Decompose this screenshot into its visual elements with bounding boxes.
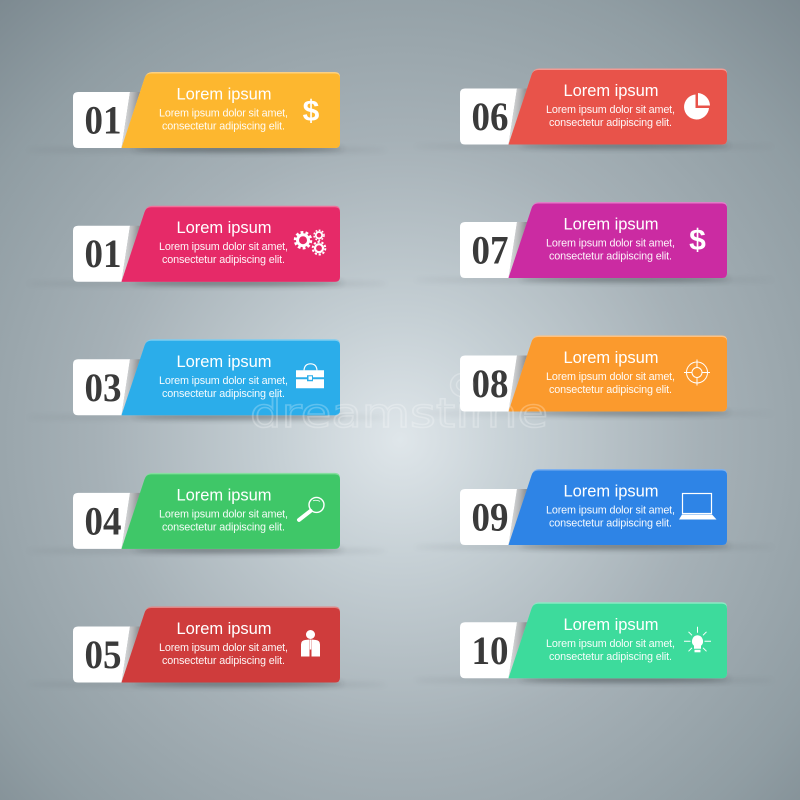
number tab: 05 [84, 632, 122, 677]
body text: consectetur adipiscing elit. [549, 250, 672, 262]
icon: businessman [301, 630, 320, 656]
body text: Lorem ipsum dolor sit amet, [159, 241, 288, 253]
coloured panel [508, 336, 727, 412]
body text [546, 238, 675, 262]
coloured panel [122, 339, 340, 415]
icon: pie chart [684, 93, 710, 119]
icon: laptop [679, 494, 716, 520]
number tab: 10 [472, 628, 508, 673]
body text [159, 241, 288, 266]
number tab [460, 222, 529, 278]
card 08 orange [414, 336, 774, 416]
body text [546, 371, 675, 396]
body text: consectetur adipiscing elit. [162, 254, 285, 266]
icon: target [684, 360, 710, 386]
coloured panel [508, 469, 727, 545]
coloured panel [122, 473, 340, 549]
body text: Lorem ipsum dolor sit amet, [546, 104, 675, 116]
heading: Lorem ipsum [564, 82, 658, 100]
body text [546, 504, 675, 530]
number tab [460, 88, 529, 144]
card 09 blue [414, 469, 774, 549]
number tab: 09 [472, 494, 508, 540]
icon: briefcase [296, 364, 324, 388]
body text: Lorem ipsum dolor sit amet, [159, 108, 288, 120]
number tab [460, 489, 529, 545]
card 01 pink [27, 206, 387, 286]
body text: Lorem ipsum dolor sit amet, [159, 375, 288, 387]
number tab [460, 622, 529, 678]
body text: consectetur adipiscing elit. [549, 384, 672, 396]
card 07 magenta [414, 202, 774, 282]
number tab [73, 359, 142, 415]
body text: Lorem ipsum dolor sit amet, [546, 504, 675, 516]
number tab [73, 92, 142, 148]
card 05 red [27, 606, 387, 686]
body text [159, 375, 288, 400]
heading: Lorem ipsum [176, 486, 272, 504]
number tab: 08 [472, 361, 508, 406]
body text: consectetur adipiscing elit. [162, 655, 285, 667]
body text: Lorem ipsum dolor sit amet, [546, 238, 675, 250]
body text: Lorem ipsum dolor sit amet, [159, 508, 288, 520]
body text [159, 508, 288, 533]
number tab: 03 [84, 365, 122, 410]
coloured panel [122, 606, 340, 682]
coloured panel [122, 72, 340, 148]
card 04 green [27, 473, 387, 553]
coloured panel [508, 202, 727, 278]
body text: consectetur adipiscing elit. [549, 651, 672, 663]
icon: light bulb [684, 627, 711, 652]
card 10 teal [414, 602, 774, 682]
number tab: 04 [84, 498, 122, 543]
card 06 coral [414, 68, 774, 148]
icon: magnifier [299, 497, 324, 520]
heading: Lorem ipsum [176, 620, 272, 638]
watermark: dreamstime [250, 391, 548, 437]
number tab: 06 [472, 94, 508, 139]
coloured panel [122, 206, 340, 282]
icon: dollar: $ [689, 224, 706, 257]
coloured panel [508, 602, 727, 678]
body text: consectetur adipiscing elit. [162, 120, 285, 132]
coloured panel [508, 68, 727, 144]
heading: Lorem ipsum [564, 616, 658, 634]
heading: Lorem ipsum [564, 216, 658, 234]
heading: Lorem ipsum [176, 86, 272, 104]
card 01 yellow [27, 72, 387, 152]
number tab: 01 [84, 231, 122, 276]
watermark [250, 374, 548, 437]
body text: Lorem ipsum dolor sit amet, [546, 371, 675, 383]
number tab [73, 226, 142, 282]
icon: dollar: $ [303, 95, 320, 128]
heading: Lorem ipsum [564, 349, 658, 367]
number tab [73, 493, 142, 549]
heading: Lorem ipsum [564, 482, 658, 500]
card 03 blue [27, 339, 387, 419]
body text: consectetur adipiscing elit. [549, 117, 672, 129]
body text: consectetur adipiscing elit. [162, 388, 285, 400]
body text [546, 104, 675, 129]
body text: Lorem ipsum dolor sit amet, [159, 642, 288, 654]
body text [546, 638, 675, 663]
heading: Lorem ipsum [176, 353, 272, 371]
number tab [73, 626, 142, 682]
number tab: 01 [84, 98, 122, 142]
number tab [460, 356, 529, 412]
body text: consectetur adipiscing elit. [162, 521, 285, 533]
heading: Lorem ipsum [176, 219, 272, 237]
body text: consectetur adipiscing elit. [549, 518, 672, 530]
icon: gears [295, 230, 325, 254]
body text [159, 108, 288, 132]
body text [159, 642, 288, 667]
body text: Lorem ipsum dolor sit amet, [546, 638, 675, 650]
number tab: 07 [472, 228, 508, 272]
